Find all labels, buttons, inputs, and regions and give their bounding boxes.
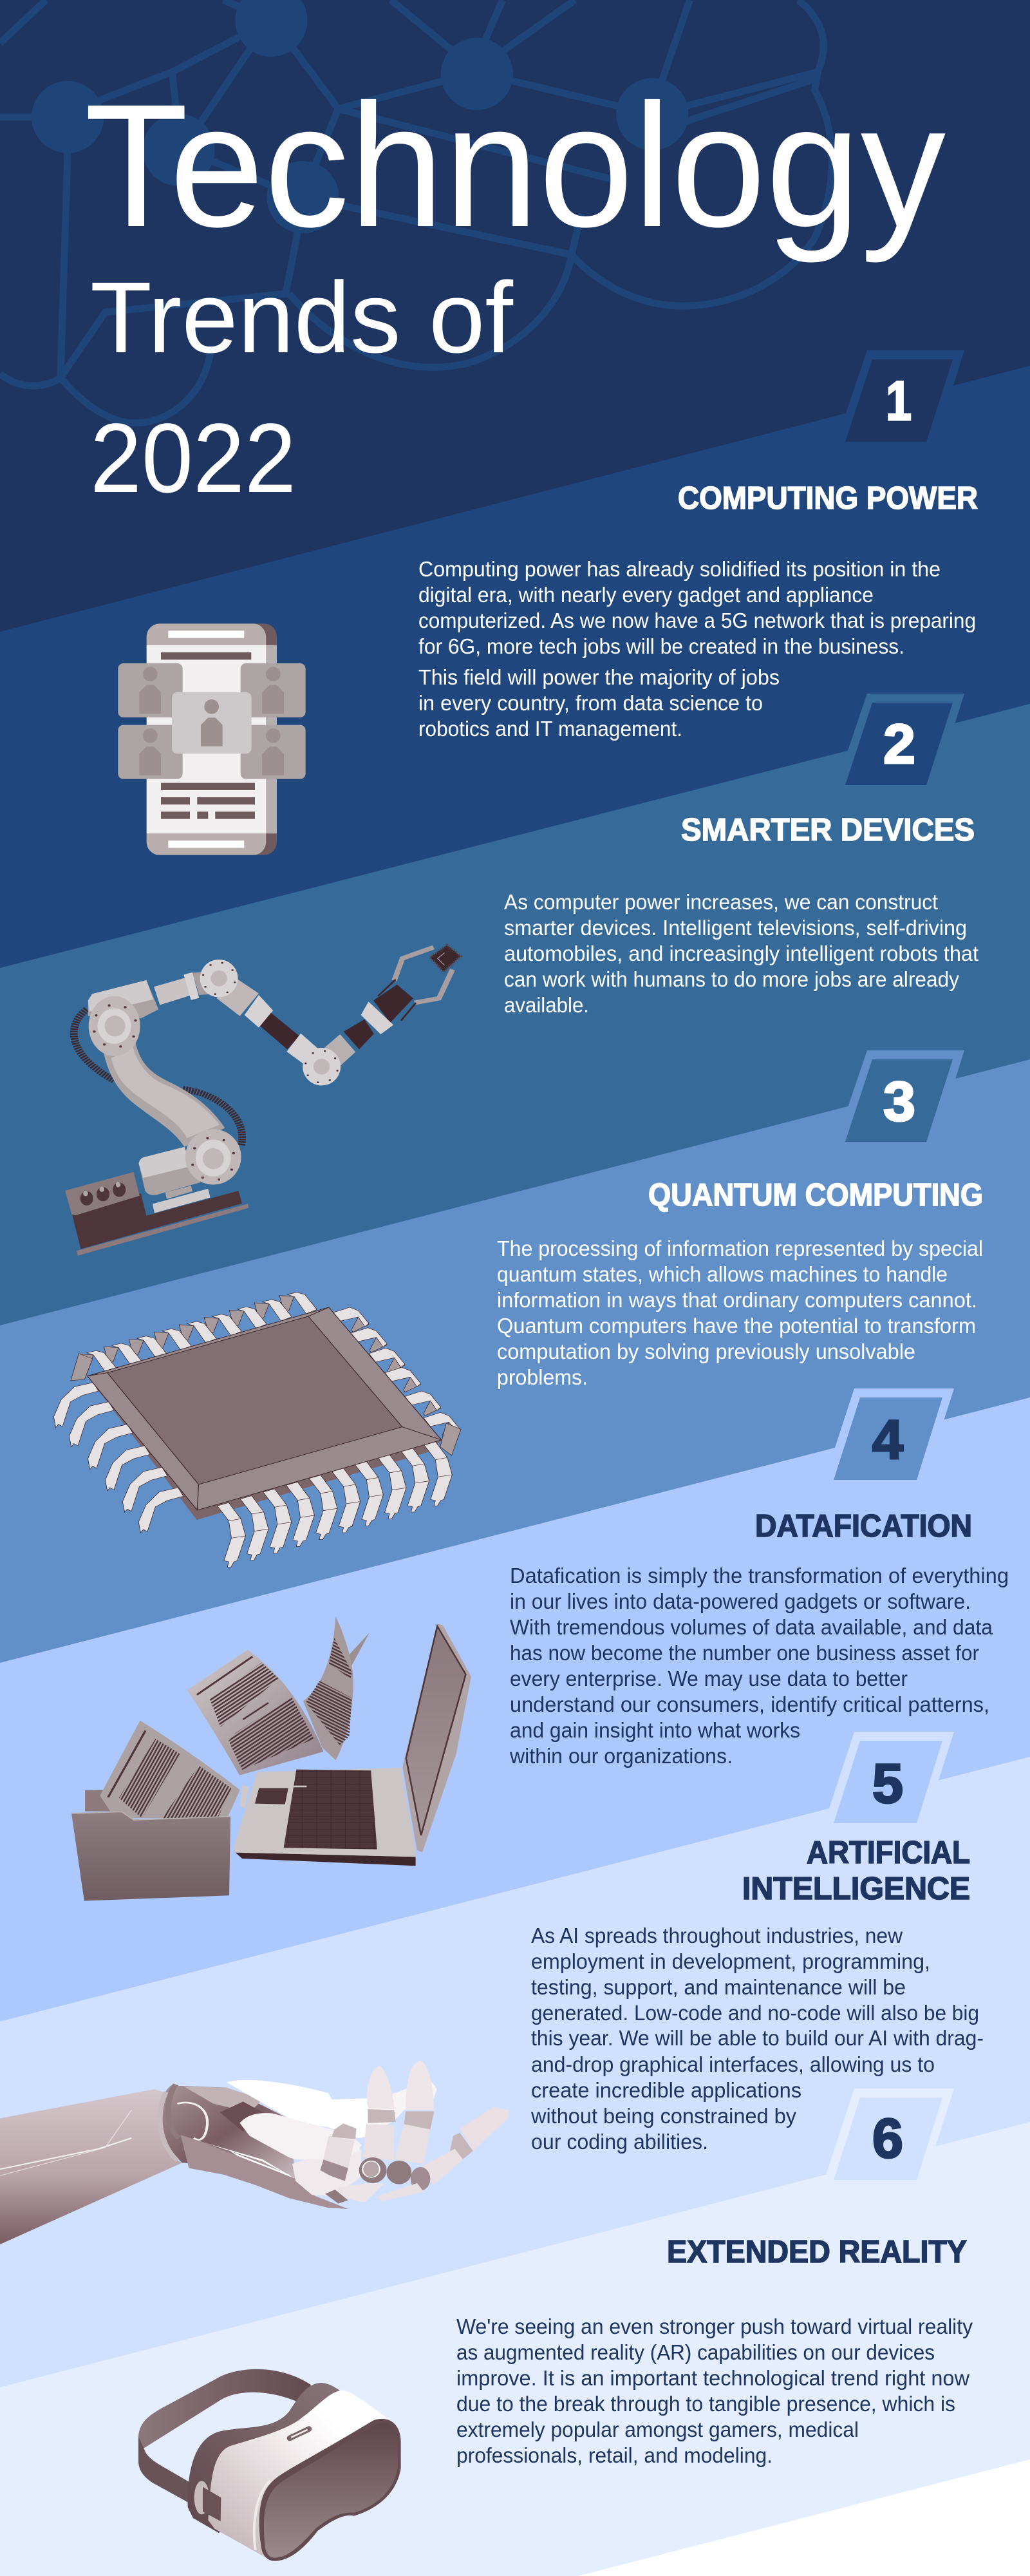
text block: datafication: Datafication is simply the transformation of everything [510, 1564, 1009, 1587]
icon: smartphone with profile cards [118, 623, 306, 855]
text block: artificial intelligence [530, 1924, 984, 2154]
icon: robot arm [65, 945, 461, 1256]
number badge 2 [833, 694, 964, 794]
text block: artificial intelligence: without being constrained by [530, 2104, 796, 2128]
number badge 5 [821, 1732, 954, 1832]
number badge 5: 5 [872, 1753, 903, 1815]
illustration: VR headset [138, 2369, 401, 2561]
text block: datafication: and gain insight into what works [510, 1718, 800, 1742]
text block: artificial intelligence: As AI spreads throughout industries, new [531, 1924, 903, 1947]
text block: computing power: for 6G, more tech jobs will be created in the business. [418, 634, 904, 658]
number badge 6 [821, 2088, 954, 2189]
text block: extended reality: professionals, retail, and modeling. [456, 2443, 772, 2467]
illustration: robotic hand [0, 2060, 509, 2244]
text block: smarter devices: can work with humans to do more jobs are already [504, 967, 959, 991]
number badge 2: 2 [883, 714, 915, 775]
heading: datafication: DATAFICATION [755, 1509, 972, 1544]
panel: computing power [118, 350, 978, 855]
title: Technology [84, 68, 946, 264]
number badge 1: 1 [886, 370, 912, 432]
number badge 4 [821, 1388, 954, 1489]
text block: artificial intelligence: employment in development, programming, [531, 1949, 930, 1973]
text block: artificial intelligence: generated. Low-code and no-code will also be big [531, 2001, 979, 2025]
panel: artificial intelligence [0, 1732, 984, 2244]
heading: artificial intelligence [742, 1835, 970, 1906]
panel: quantum computing [53, 1050, 983, 1567]
number badge 3 [833, 1050, 964, 1151]
text block: datafication: every enterprise. We may use data to better [510, 1667, 908, 1690]
text block: extended reality: as augmented reality (AR) capabilities on our devices [456, 2340, 935, 2364]
number badge 1 [833, 350, 964, 451]
text block: computing power: in every country, from data science to [418, 691, 763, 715]
text block: datafication [509, 1564, 1009, 1768]
heading: extended reality: EXTENDED REALITY [667, 2235, 967, 2269]
heading: artificial intelligence: ARTIFICIAL [807, 1835, 970, 1870]
icon: microchip [53, 1293, 461, 1567]
text block: artificial intelligence: testing, support, and maintenance will be [531, 1975, 906, 1999]
text block: quantum computing: Quantum computers have the potential to transform [497, 1314, 976, 1338]
text block: computing power: This field will power the majority of jobs [418, 665, 780, 689]
text block: extended reality: extremely popular amongst gamers, medical [456, 2418, 859, 2441]
heading: quantum computing: QUANTUM COMPUTING [648, 1178, 983, 1213]
text block: quantum computing: information in ways that ordinary computers cannot. [497, 1288, 977, 1312]
text block: datafication: With tremendous volumes of data available, and data [510, 1615, 993, 1639]
text block: quantum computing [497, 1236, 983, 1389]
text block: quantum computing: computation by solving previously unsolvable [497, 1340, 915, 1363]
title: Trends of [90, 261, 513, 374]
text block: extended reality: due to the break through to tangible presence, which is [456, 2392, 955, 2416]
network graphic behind the title [0, 0, 832, 423]
text block: computing power: digital era, with nearly every gadget and appliance [418, 583, 874, 607]
text block: quantum computing: The processing of information represented by special [497, 1236, 983, 1260]
text block: quantum computing: problems. [497, 1365, 588, 1389]
text block: smarter devices: As computer power increases, we can construct [504, 890, 938, 914]
number badge 4: 4 [872, 1409, 903, 1471]
text block: smarter devices: automobiles, and increasingly intelligent robots that [504, 942, 979, 965]
heading: smarter devices: SMARTER DEVICES [681, 813, 975, 848]
text block: datafication: has now become the number one business asset for [510, 1641, 979, 1665]
text block: computing power: Computing power has already solidified its position in the [418, 557, 941, 581]
text block: datafication: in our lives into data-powered gadgets or software. [510, 1589, 971, 1613]
heading: computing power: COMPUTING POWER [678, 481, 978, 516]
panel: extended reality [138, 2088, 973, 2561]
text block: artificial intelligence: and-drop graphical interfaces, allowing us to [531, 2052, 935, 2076]
text block: artificial intelligence: this year. We will be able to build our AI with drag- [531, 2026, 984, 2050]
text block: extended reality [456, 2315, 973, 2467]
text block: computing power [418, 557, 976, 741]
text block: computing power: robotics and IT management. [418, 717, 682, 741]
text block: datafication: understand our consumers, identify critical patterns, [510, 1692, 989, 1716]
illustration: folder, documents and laptop [71, 1616, 471, 1901]
heading: artificial intelligence: INTELLIGENCE [742, 1871, 970, 1906]
text block: extended reality: improve. It is an important technological trend right now [456, 2366, 969, 2390]
text block: smarter devices [504, 890, 979, 1017]
title [84, 68, 946, 513]
text block: smarter devices: available. [504, 993, 589, 1017]
text block: extended reality: We're seeing an even stronger push toward virtual reality [456, 2315, 973, 2338]
panel: smarter devices [65, 694, 979, 1256]
text block: datafication: within our organizations. [509, 1744, 733, 1768]
number badge 3: 3 [883, 1071, 915, 1133]
text block: quantum computing: quantum states, which allows machines to handle [497, 1262, 948, 1286]
number badge 6: 6 [872, 2108, 903, 2170]
panel: datafication [71, 1388, 1009, 1901]
text block: artificial intelligence: our coding abilities. [531, 2130, 708, 2154]
title: 2022 [90, 403, 296, 513]
text block: artificial intelligence: create incredible applications [531, 2078, 801, 2102]
text block: computing power: computerized. As we now have a 5G network that is preparing [418, 609, 976, 632]
text block: smarter devices: smarter devices. Intelligent televisions, self-driving [504, 916, 967, 940]
